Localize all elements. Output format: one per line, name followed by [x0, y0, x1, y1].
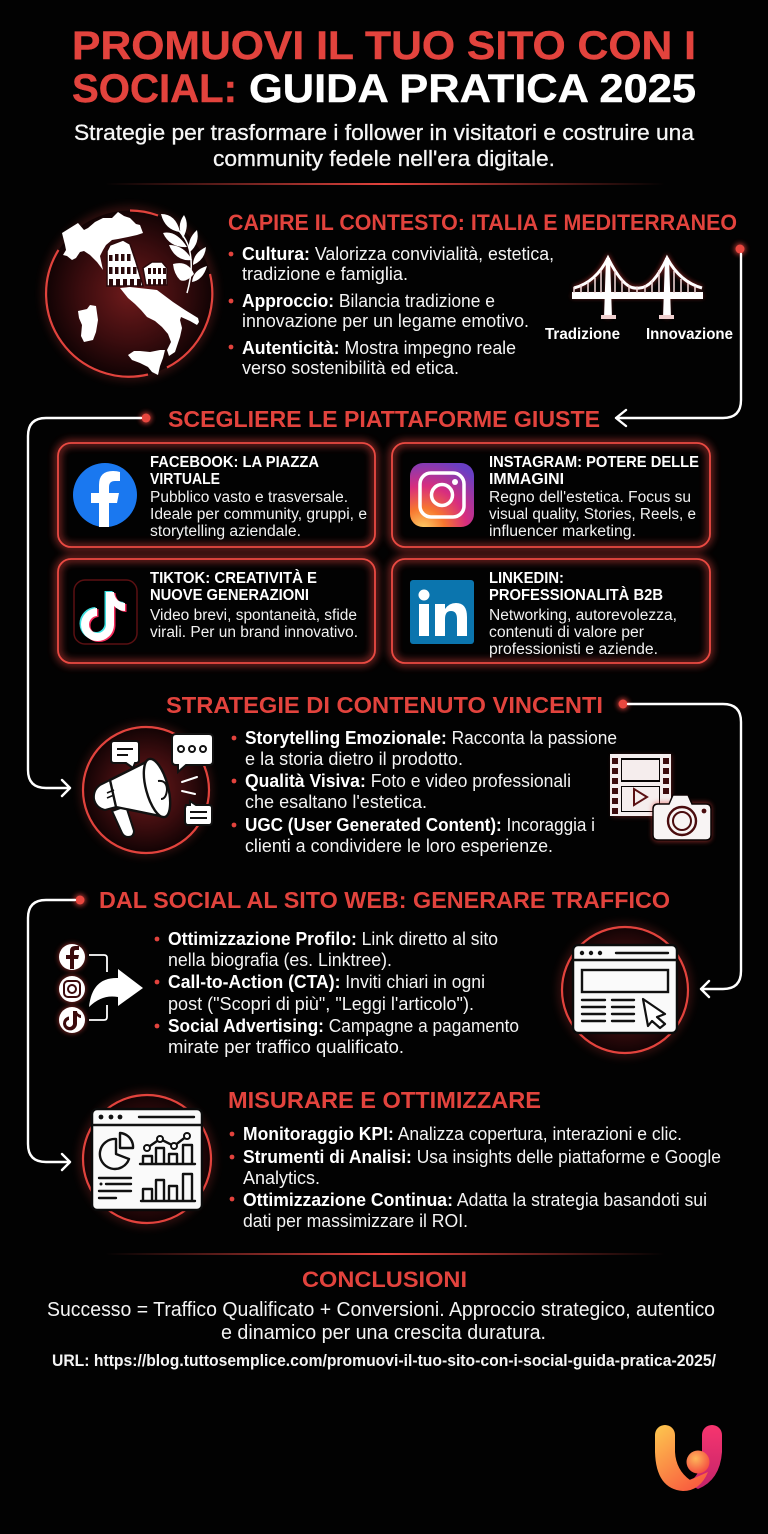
card: Facebook: Ideale per community, gruppi, e [150, 506, 367, 523]
card: LinkedIn: contenuti di valore per [489, 624, 644, 641]
panel: strategie di contenuto [79, 692, 712, 857]
card: TikTok: TIKTOK: CREATIVITÀ E [150, 568, 317, 587]
conclusion text: Successo = Traffico Qualificato + Conversioni. Approccio strategico, autentico [47, 1299, 715, 1321]
heading: CAPIRE IL CONTESTO: ITALIA E MEDITERRANEO [228, 210, 737, 235]
card: Instagram [392, 443, 710, 547]
card: Instagram: influencer marketing. [489, 523, 636, 540]
heading: STRATEGIE DI CONTENUTO VINCENTI [166, 692, 603, 718]
card: Facebook [58, 443, 375, 547]
bullet list: clienti a condividere le loro esperienze. [245, 835, 553, 856]
card: LinkedIn: professionisti e aziende. [489, 641, 658, 658]
connector arrow: section 3 to 4 [617, 698, 741, 997]
card: LinkedIn: Networking, autorevolezza, [489, 607, 677, 624]
conclusion text [47, 1299, 715, 1344]
subtitle [74, 120, 695, 171]
bullet list: Monitoraggio KPI: Analizza copertura, interazioni e clic. [243, 1123, 682, 1144]
bullet list: Ottimizzazione Continua: Adatta la strategia basandoti sui [243, 1189, 707, 1210]
bullet list: verso sostenibilità ed etica. [242, 357, 459, 378]
icon: Italy globe with Colosseum and olive branch [42, 206, 218, 382]
bullet list: innovazione per un legame emotivo. [242, 310, 529, 331]
card: LinkedIn: LINKEDIN: [489, 570, 564, 587]
icon: Instagram [410, 463, 474, 527]
heading: DAL SOCIAL AL SITO WEB: GENERARE TRAFFICO [99, 887, 670, 913]
heading: CONCLUSIONI [302, 1267, 467, 1292]
icon: film strip and camera [610, 754, 712, 842]
title [72, 24, 696, 111]
bridge labels: Tradizione [545, 326, 620, 343]
panel: conclusioni [47, 1267, 716, 1370]
bridge labels: Innovazione [646, 326, 733, 343]
icon: social icons flowing into arrow [58, 943, 143, 1034]
bullet list: mirate per traffico qualificato. [168, 1036, 404, 1057]
bullet list: Storytelling Emozionale: Racconta la passione [245, 727, 617, 748]
bullet list: dati per massimizzare il ROI. [243, 1210, 468, 1231]
bullet list: tradizione e famiglia. [242, 263, 408, 284]
bullet list: che esaltano l'estetica. [245, 791, 427, 812]
card: TikTok: Video brevi, spontaneità, sfide [150, 607, 357, 624]
bullet list: Cultura: Valorizza convivialità, estetica, [242, 243, 554, 264]
bullet list: Strumenti di Analisi: Usa insights delle piattaforme e Google [243, 1146, 721, 1167]
subtitle: Strategie per trasformare i follower in visitatori e costruire una [74, 120, 695, 145]
card: Facebook: Pubblico vasto e trasversale. [150, 489, 348, 506]
olive branch [161, 214, 207, 293]
bullet list: Analytics. [243, 1167, 320, 1188]
panel: dal social al sito web [58, 887, 693, 1058]
bullet list: Social Advertising: Campagne a pagamento [168, 1015, 519, 1036]
card: Facebook: storytelling aziendale. [150, 523, 301, 540]
bullet list [230, 1123, 721, 1231]
card: TikTok: virali. Per un brand innovativo. [150, 624, 358, 641]
icon: LinkedIn [410, 580, 474, 644]
card: LinkedIn [392, 559, 710, 663]
source URL: URL: https://blog.tuttosemplice.com/promuovi-il-tuo-sito-con-i-social-guida-pratica-2025/ [52, 1352, 716, 1370]
bullet list: Call-to-Action (CTA): Inviti chiari in ogni [168, 971, 485, 992]
title: GUIDA PRATICA 2025 [249, 67, 696, 111]
bridge labels [545, 326, 733, 343]
icon: analytics dashboard [78, 1090, 216, 1228]
connector arrow: section 1 to 2 [616, 243, 746, 426]
heading: piattaforme: SCEGLIERE LE PIATTAFORME GIUSTE [168, 406, 600, 432]
bullet list: Qualità Visiva: Foto e video professionali [245, 770, 571, 791]
icon: logo [655, 1425, 722, 1491]
bullet list: Autenticità: Mostra impegno reale [242, 337, 516, 358]
card: Instagram: Regno dell'estetica. Focus su [489, 489, 691, 506]
card: Instagram: visual quality, Stories, Reels, e [489, 506, 696, 523]
card: Instagram: IMMAGINI [489, 471, 564, 488]
card: Facebook: FACEBOOK: LA PIAZZA [150, 454, 319, 471]
icon: browser window with cursor [557, 922, 693, 1058]
bullet list: Ottimizzazione Profilo: Link diretto al sito [168, 928, 498, 949]
connector arrow: section 2 to 3 [28, 412, 152, 796]
bullet list: post ("Scopri di più", "Leggi l'articolo"). [168, 993, 474, 1014]
title: PROMUOVI IL TUO SITO CON I [72, 24, 696, 68]
card: LinkedIn: PROFESSIONALITÀ B2B [489, 585, 663, 604]
card: TikTok [58, 559, 375, 663]
icon: TikTok [74, 580, 137, 644]
bullet list [155, 928, 519, 1057]
connector arrow: section 4 to 5 [28, 894, 86, 1170]
conclusion text: e dinamico per una crescita duratura. [221, 1322, 546, 1344]
bullet list: Approccio: Bilancia tradizione e [242, 290, 495, 311]
panel: misurare e ottimizzare [78, 1087, 721, 1231]
card: TikTok: NUOVE GENERAZIONI [150, 587, 309, 604]
card: Facebook: VIRTUALE [150, 471, 220, 488]
panel: contesto Italia [42, 206, 737, 382]
bullet list [232, 727, 617, 856]
card: Instagram: INSTAGRAM: POTERE DELLE [489, 454, 699, 471]
subtitle: community fedele nell'era digitale. [213, 146, 555, 171]
bullet list: nella biografia (es. Linktree). [168, 949, 392, 970]
icon: bridge [572, 258, 703, 319]
bullet list [229, 243, 554, 378]
heading: MISURARE E OTTIMIZZARE [228, 1087, 541, 1113]
panel: platform cards [58, 443, 710, 663]
bullet list: e la storia dietro il prodotto. [245, 748, 463, 769]
icon: megaphone with speech bubbles [79, 723, 213, 857]
colosseum [107, 240, 167, 286]
icon: Facebook [73, 463, 137, 527]
title: SOCIAL: [72, 67, 237, 111]
bullet list: UGC (User Generated Content): Incoraggia i [245, 814, 595, 835]
